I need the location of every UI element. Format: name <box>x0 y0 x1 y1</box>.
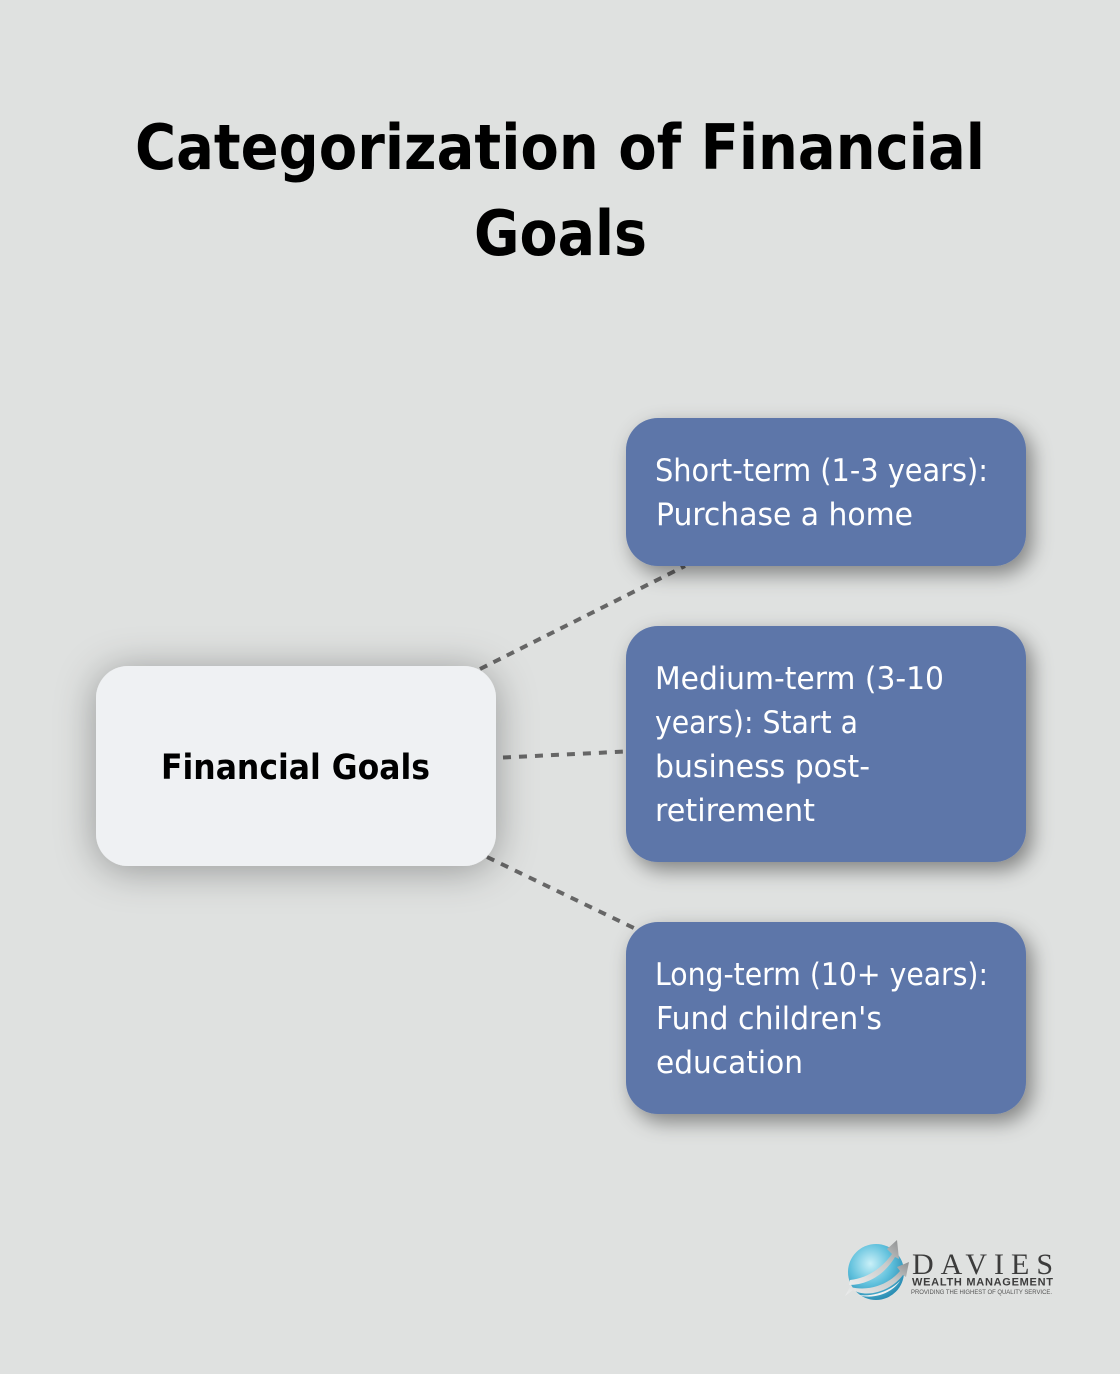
text: short-term goal: Short-term (1-3 years): <box>655 453 988 489</box>
connector: financial goals to medium-term <box>503 752 626 758</box>
label: financial goals: Financial Goals <box>161 748 430 788</box>
text: short-term goal: Purchase a home <box>656 497 913 533</box>
icon: globe with arrows <box>845 1240 909 1300</box>
text: long-term goal: Long-term (10+ years): <box>655 957 988 993</box>
panel: short-term goal <box>626 418 1026 566</box>
panel: long-term goal <box>626 922 1026 1114</box>
connector: financial goals to short-term <box>480 566 685 669</box>
text: medium-term goal: years): Start a <box>655 705 858 741</box>
wordmark <box>911 1248 1053 1296</box>
text: medium-term goal: retirement <box>655 793 815 829</box>
text: medium-term goal <box>655 661 944 829</box>
title: Goals <box>474 197 647 270</box>
text: long-term goal <box>655 957 988 1081</box>
wordmark: DAVIES <box>912 1248 1053 1281</box>
text: long-term goal: education <box>656 1045 803 1081</box>
text: medium-term goal: business post- <box>655 749 870 785</box>
panel: financial goals <box>96 666 496 866</box>
title: Categorization of Financial <box>135 111 985 184</box>
logo: Davies Wealth Management <box>845 1240 1053 1300</box>
title <box>135 111 985 270</box>
wordmark: WEALTH MANAGEMENT <box>912 1276 1053 1288</box>
text: medium-term goal: Medium-term (3-10 <box>655 661 944 697</box>
connector: financial goals to long-term <box>487 857 640 931</box>
panel: medium-term goal <box>626 626 1026 862</box>
text: short-term goal <box>655 453 988 533</box>
wordmark: PROVIDING THE HIGHEST OF QUALITY SERVICE. <box>911 1289 1052 1296</box>
text: long-term goal: Fund children's <box>656 1001 882 1037</box>
